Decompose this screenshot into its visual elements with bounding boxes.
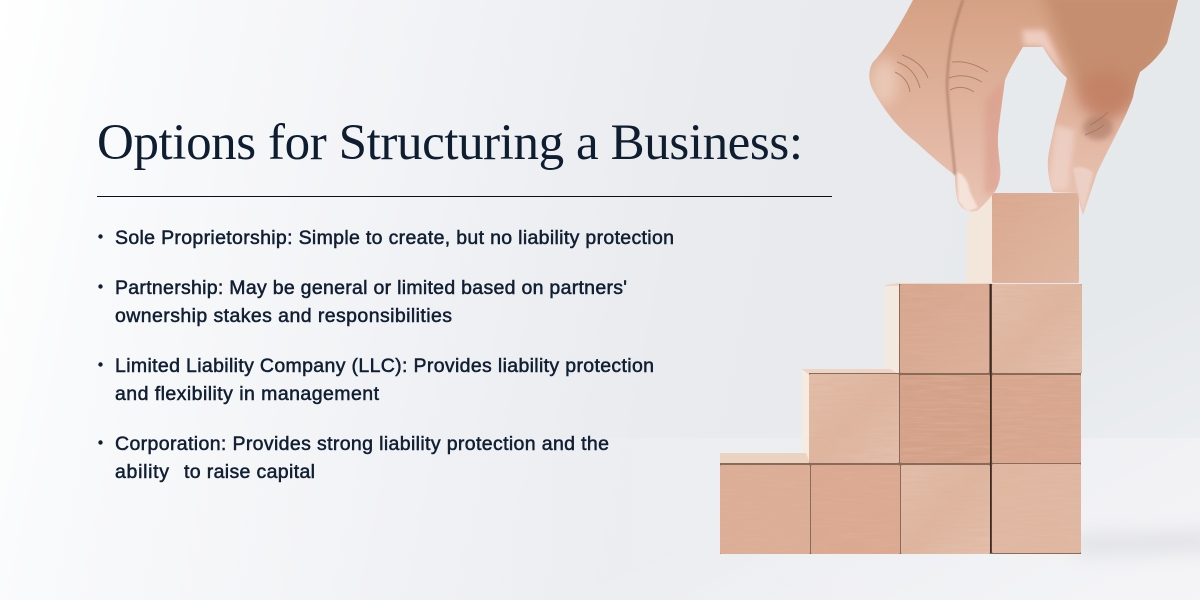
title: Options for Structuring a Business: — [97, 115, 803, 171]
bullet: corporation — [98, 433, 609, 483]
bullet: sole proprietorship: Sole Proprietorship: Simple to create, but no liability protection — [115, 227, 674, 249]
list of business structures — [98, 227, 674, 483]
knuckle creases — [895, 55, 1108, 135]
skin shading — [870, 0, 1190, 195]
dark vertical seam — [990, 284, 992, 553]
hand silhouette — [869, 0, 1178, 215]
bullet: corporation: to raise capital — [184, 461, 315, 483]
bullet: limited liability company: and flexibility in management — [115, 383, 380, 405]
index fingernail — [957, 172, 978, 212]
bullet: partnership: ownership stakes and responsibilities — [115, 305, 452, 327]
divider — [97, 196, 832, 197]
thumbnail — [1073, 167, 1093, 214]
knuckle highlight on ring finger — [870, 58, 898, 106]
pale web between fingers — [1022, 30, 1065, 75]
bullet: limited liability company — [98, 355, 654, 405]
bullet: corporation: ability — [115, 461, 169, 483]
gaps behind blocks — [720, 284, 1082, 554]
block front faces — [720, 193, 1082, 554]
finger separation — [947, 0, 963, 175]
bullet: corporation: Corporation: Provides strong liability protection and the — [115, 433, 609, 455]
block side faces — [720, 193, 994, 465]
reddish thumb shade — [1077, 71, 1133, 119]
dark thumb knuckle — [1083, 116, 1113, 140]
bullet: partnership: Partnership: May be general or limited based on partners' — [115, 277, 627, 299]
bullet: limited liability company: Limited Liability Company (LLC): Provides liability protection — [115, 355, 654, 377]
thumb pale underside — [1048, 125, 1075, 190]
back of hand tone — [1042, 0, 1178, 120]
pink side of index finger — [985, 80, 1005, 195]
bullet: partnership — [98, 277, 627, 327]
block shadow — [1075, 530, 1200, 556]
wooden block staircase — [720, 193, 1200, 556]
hand placing the top block — [869, 0, 1190, 215]
